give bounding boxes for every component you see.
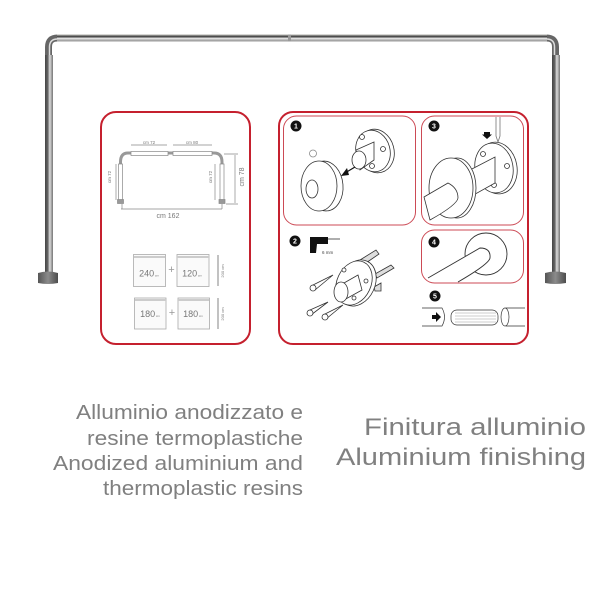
step 5: rail connector: 5	[433, 294, 437, 300]
step 2: wall plate, screws and plugs	[290, 236, 394, 320]
material description: thermoplastic resins	[103, 477, 303, 500]
dimension drawing	[116, 145, 238, 209]
icon: drill	[310, 237, 328, 253]
panel: dimensions and curtain sizes: 180 cm	[183, 309, 203, 319]
panel step 3	[422, 116, 524, 225]
dimension labels: cm 72	[208, 170, 213, 183]
panel: assembly instructions	[279, 112, 528, 344]
icon: arrow	[432, 312, 441, 322]
panel step 1: 1	[294, 124, 298, 130]
dimension labels: cm 72	[143, 140, 156, 145]
finishing description	[336, 414, 586, 471]
left base	[38, 272, 58, 284]
material description: Anodized aluminium and	[53, 452, 303, 475]
panel: dimensions and curtain sizes: 120 cm	[182, 268, 202, 278]
shower curtain rail photo	[38, 34, 566, 284]
dimension labels: cm 78	[239, 167, 246, 187]
panel step 4: 4	[432, 240, 436, 246]
panel step 1	[284, 116, 416, 225]
panel: dimensions and curtain sizes	[101, 112, 250, 344]
step 2: wall plate, screws and plugs: 6 mm	[322, 250, 334, 255]
panel: dimensions and curtain sizes: +	[168, 264, 175, 276]
step 5: rail connector	[422, 290, 525, 326]
step 2: wall plate, screws and plugs: 2	[293, 238, 297, 246]
curtain sizes	[134, 254, 218, 329]
finishing description: Aluminium finishing	[336, 444, 586, 471]
panel: dimensions and curtain sizes: 240 cm	[139, 268, 159, 278]
panel: dimensions and curtain sizes: +	[169, 307, 175, 319]
dimension labels: cm 162	[157, 213, 180, 220]
material description	[53, 401, 303, 500]
material description: resine termoplastiche	[87, 427, 303, 450]
right base	[545, 272, 566, 284]
dimension labels	[107, 140, 246, 220]
material description: Alluminio anodizzato e	[76, 401, 303, 424]
finishing description: Finitura alluminio	[364, 414, 586, 441]
panel: dimensions and curtain sizes: 200 cm	[220, 307, 225, 321]
panel step 3: 3	[432, 124, 436, 130]
panel: dimensions and curtain sizes: 200 cm	[220, 264, 225, 278]
panel: dimensions and curtain sizes: 180 cm	[140, 309, 160, 319]
dimension labels: cm 72	[107, 170, 112, 183]
dimension labels: cm 80	[186, 140, 199, 145]
panel step 4	[422, 230, 524, 283]
